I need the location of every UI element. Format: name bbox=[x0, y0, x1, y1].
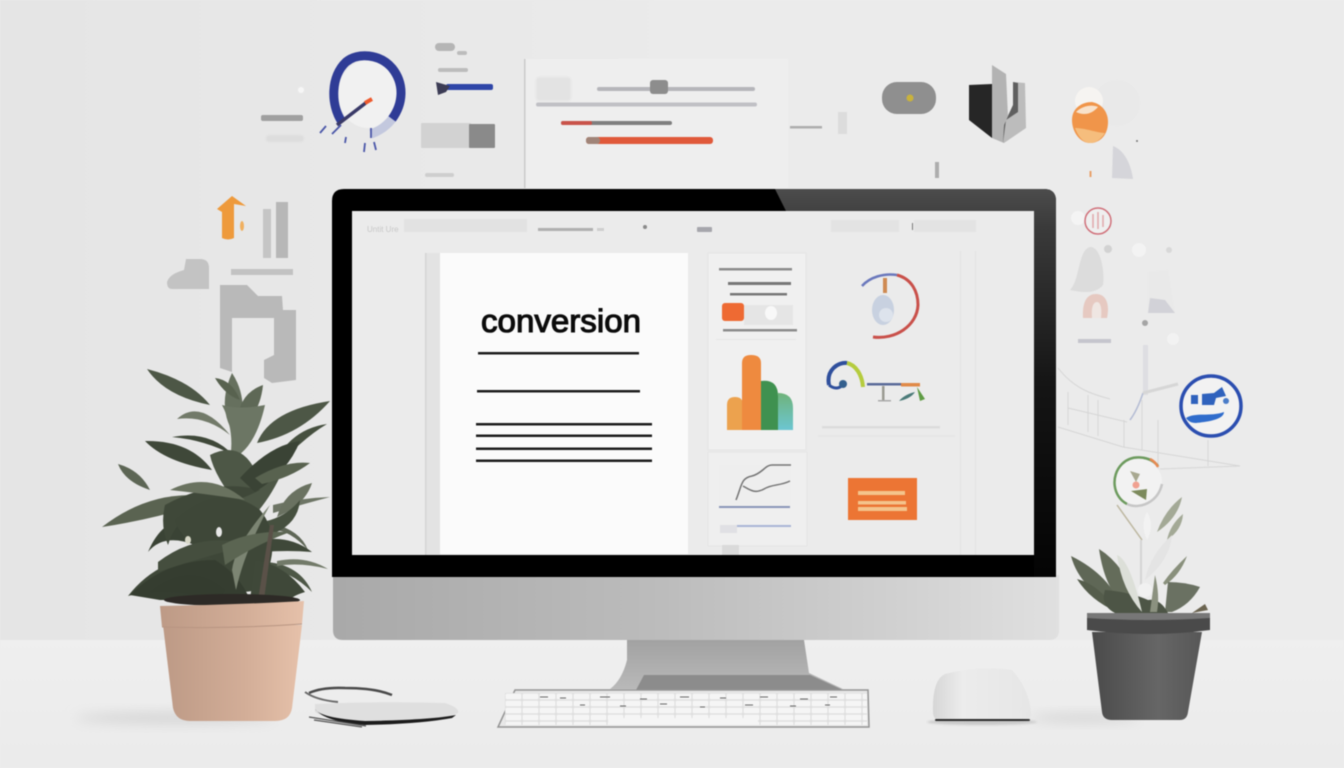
soil bbox=[164, 594, 300, 606]
icon: blue brush bar and grey blocks bbox=[421, 43, 495, 177]
icon: screen spiral dial and slider bbox=[829, 363, 925, 402]
card: line chart bbox=[708, 452, 807, 555]
leaves: left plant bbox=[102, 369, 330, 600]
dark grey pot bbox=[1087, 613, 1210, 720]
keyboard bbox=[498, 690, 869, 727]
icon: orange and white orb bbox=[1072, 80, 1140, 179]
panel: floating settings card above monitor bbox=[524, 59, 788, 188]
screen header bar: Untit Ure bbox=[367, 225, 399, 234]
icon: green circle badge bbox=[1114, 457, 1162, 506]
bar chart bbox=[727, 355, 793, 430]
desk surface bbox=[0, 640, 1344, 768]
card outline: dial section bbox=[818, 426, 955, 436]
right plant bbox=[1030, 497, 1210, 722]
icon: screen gauge with red arc bbox=[862, 274, 918, 337]
card: text and orange tag bbox=[708, 253, 806, 450]
monitor chin bbox=[333, 575, 1059, 640]
icon: computer mouse bbox=[927, 668, 1037, 725]
monitor screen bbox=[352, 211, 1034, 555]
icon: orange text card bbox=[848, 478, 917, 520]
icon: red circle badge bbox=[1071, 208, 1111, 234]
shadow: left pot bbox=[75, 713, 275, 723]
sidebar rule bbox=[425, 253, 426, 555]
icon: blue circle badge bbox=[1181, 376, 1241, 436]
icon: grey pill with yellow dot bbox=[882, 82, 936, 114]
icon: grey labels left of gauge bbox=[261, 87, 304, 142]
icon: small connector tick bbox=[790, 112, 939, 178]
icon: orange up arrow bbox=[217, 196, 246, 240]
monitor bbox=[332, 189, 1059, 690]
document page bbox=[440, 253, 688, 554]
left plant bbox=[75, 369, 330, 723]
diagram: thin network lines bbox=[1058, 368, 1240, 470]
terracotta pot bbox=[160, 601, 304, 721]
icon: faint grey shapes and spheres bbox=[1070, 243, 1179, 420]
icon: grey bars and blocks bbox=[167, 202, 293, 289]
icon: tablet and stylus on desk bbox=[305, 688, 458, 727]
icon: grey folder outline bbox=[220, 285, 296, 383]
document heading: conversion bbox=[481, 303, 641, 339]
monitor bezel bbox=[332, 189, 1056, 577]
shadow: right pot bbox=[1030, 714, 1140, 722]
screen header bar bbox=[367, 219, 976, 234]
document text lines bbox=[476, 352, 652, 462]
monitor stand bbox=[610, 640, 843, 690]
leaves: right plant bbox=[1071, 497, 1208, 613]
icon: dark and grey shield bbox=[969, 65, 1026, 143]
icon: blue gauge dial bbox=[320, 56, 401, 152]
